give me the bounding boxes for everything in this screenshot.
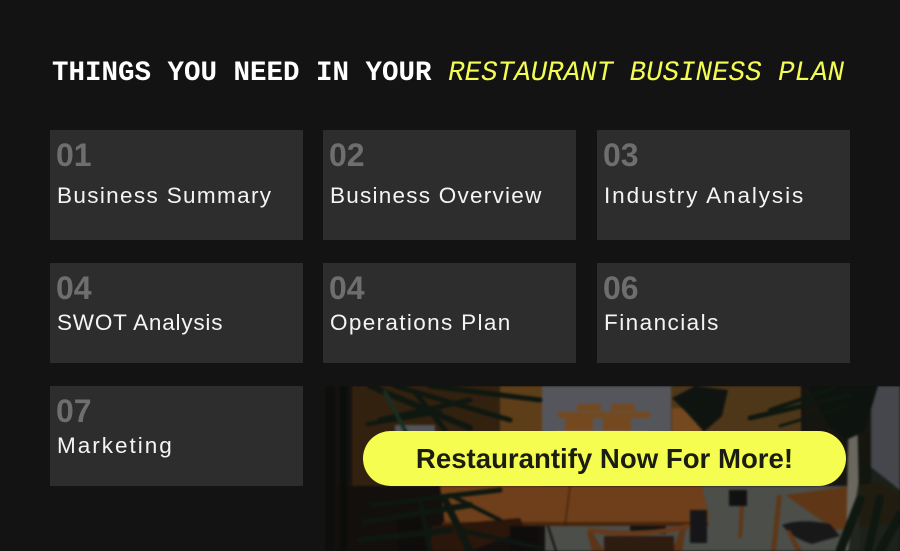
card 03: Industry Analysis: Industry Analysis (604, 183, 805, 208)
plants (325, 386, 900, 551)
right bench and stool (785, 482, 900, 530)
card 01: Business Summary (50, 130, 303, 240)
card 06: Financials (597, 263, 850, 363)
card 04: Operations Plan (323, 263, 576, 363)
card 04: SWOT Analysis (50, 263, 303, 363)
card 02: Business Overview: 02 (329, 137, 365, 173)
palm fronds (360, 386, 900, 551)
restaurant photo (351, 386, 900, 551)
card 04: Operations Plan: Operations Plan (330, 310, 512, 335)
title: THINGS YOU NEED IN YOUR RESTAURANT BUSINESS PLAN (52, 58, 844, 89)
palm trunk (846, 400, 860, 551)
card 04: SWOT Analysis: SWOT Analysis (57, 310, 223, 335)
dark plant top centre (672, 386, 728, 432)
card 06: Financials: 06 (603, 270, 639, 306)
card 02: Business Overview (323, 130, 576, 240)
call to action button (363, 431, 846, 486)
main wooden table (440, 486, 709, 526)
card 07: Marketing (50, 386, 303, 486)
upper tables and chairs (558, 404, 702, 438)
card 04: Operations Plan: 04 (329, 270, 365, 306)
card 07: Marketing: 07 (56, 393, 92, 429)
card 06: Financials: Financials (604, 310, 720, 335)
card 02: Business Overview: Business Overview (330, 183, 543, 208)
left dark chair and legs (430, 518, 525, 551)
card 01: Business Summary: Business Summary (57, 183, 272, 208)
card 03: Industry Analysis (597, 130, 850, 240)
card 07: Marketing: Marketing (57, 433, 174, 458)
card 04: SWOT Analysis: 04 (56, 270, 92, 306)
card 01: Business Summary: 01 (56, 137, 92, 173)
call to action button: Restaurantify Now For More! (416, 443, 793, 474)
card 03: Industry Analysis: 03 (603, 137, 639, 173)
wooden chair (588, 526, 690, 533)
